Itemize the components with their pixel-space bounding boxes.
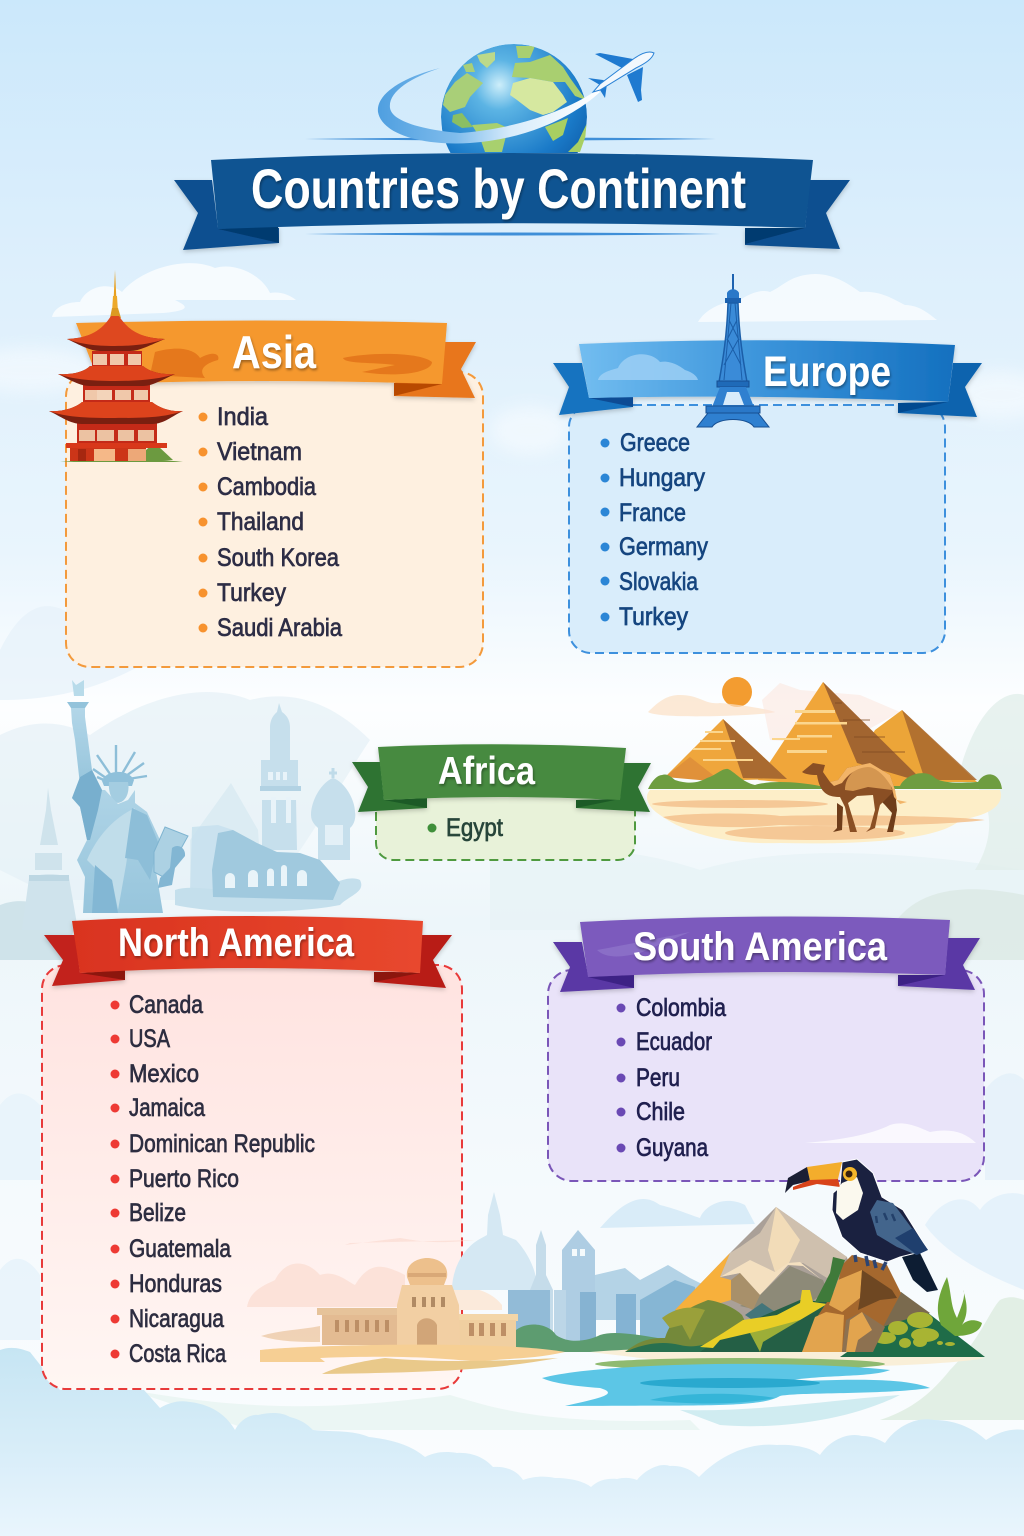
Asia country list: Turkey [217,579,286,607]
North America country list: Jamaica [129,1094,205,1122]
large pyramid [758,682,925,786]
Asia panel box [66,372,483,667]
South America country list: Chile [636,1098,685,1126]
Asia country list: Thailand [217,508,304,536]
background clouds [0,348,1024,1536]
globe [441,44,587,153]
mountain [675,1207,870,1352]
Asia country list: Saudi Arabia [217,614,342,642]
illustration: pyramids and camel [647,677,1002,843]
North America country list: Puerto Rico [129,1165,239,1193]
Africa heading: Africa [438,750,535,793]
plant [938,1277,982,1336]
horizon line [305,138,716,140]
cloud behind Asia [52,263,296,317]
desert ground [647,790,1001,843]
Africa ribbon [352,744,651,812]
North America country list: Mexico [129,1060,199,1088]
South America panel box [548,970,984,1181]
panel: South America [548,916,984,1181]
Europe country list: Slovakia [619,568,698,596]
South America ribbon [553,916,980,992]
North America country list: Costa Rica [129,1340,226,1368]
banner band [211,153,813,229]
Asia ribbon [76,320,476,398]
Asia country list: India [217,403,268,431]
South America heading: South America [633,925,888,969]
South America country list: Guyana [636,1134,708,1162]
North America country list: USA [129,1025,170,1053]
North America ribbon [44,916,452,988]
panel: Europe [553,340,982,653]
North America country list: Belize [129,1199,186,1227]
panel: North America [42,916,462,1389]
airplane [588,52,654,102]
South America country list: Peru [636,1064,680,1092]
Africa country list: Egypt [446,814,503,842]
camel [802,763,907,832]
banner tails [174,180,850,250]
Europe country list: Hungary [619,464,705,492]
Asia country list: Cambodia [217,473,316,501]
Europe ribbon [553,340,982,417]
illustration: globe and airplane [307,44,714,153]
Africa country list [428,814,503,842]
Africa panel box [376,790,635,860]
Europe heading: Europe [763,348,891,396]
Europe country list [600,429,708,631]
Europe panel box [569,405,945,653]
icon: Eiffel tower [697,274,769,427]
North America country list: Guatemala [129,1235,231,1263]
Asia heading: Asia [232,326,316,378]
bushes [648,769,1002,789]
Europe country list: Germany [619,533,708,561]
Asia country list: South Korea [217,544,339,572]
North America country list: Dominican Republic [129,1130,315,1158]
illustration: mountain and toucan [625,1159,985,1357]
silhouette: western monument left [22,788,78,930]
icon: pagoda [49,270,183,462]
silhouette: skyline behind statue [175,703,361,912]
South America country list: Colombia [636,994,726,1022]
Asia country list [198,403,342,642]
North America panel box [42,965,462,1389]
panel: Africa [352,744,651,860]
small pyramid left [665,719,787,780]
toucan [785,1159,938,1292]
icon: Statue of Liberty [67,680,188,913]
rock [802,1255,901,1352]
Europe country list: Greece [620,429,690,457]
sand [260,1326,565,1374]
Asia country list: Vietnam [217,438,302,466]
small pyramid right [845,710,977,782]
North America country list: Nicaragua [129,1305,224,1333]
South America country list [616,994,726,1162]
illustration: palace and coastline [247,1192,985,1426]
title banner [174,153,850,250]
Europe country list: France [619,499,686,527]
North America country list: Canada [129,991,203,1019]
South America country list: Ecuador [636,1028,712,1056]
swoosh [378,68,600,143]
palace [317,1258,518,1347]
cloud behind Europe [698,274,937,322]
forest [625,1300,760,1352]
line under banner [305,232,720,236]
lake [542,1358,930,1426]
panel: Asia [66,320,483,667]
title: Countries by Continent [251,157,746,220]
Europe country list: Turkey [619,603,688,631]
hill [840,1292,985,1357]
North America heading: North America [118,921,355,965]
sun [722,677,752,707]
skyline [452,1192,710,1352]
North America country list: Honduras [129,1270,222,1298]
North America country list [110,991,315,1368]
bottom cloud bank [0,1348,1024,1536]
